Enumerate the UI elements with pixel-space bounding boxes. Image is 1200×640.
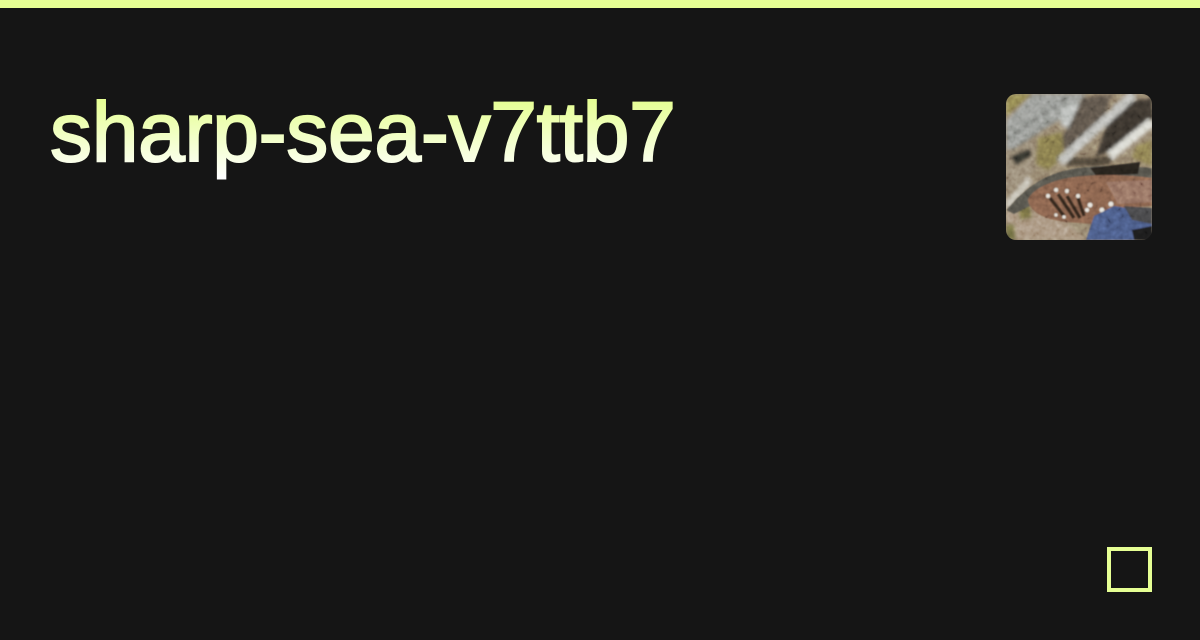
boot sole [1006,166,1152,214]
photo grain [1006,94,1152,240]
boot laces [1050,194,1084,218]
boot leather [1028,175,1152,224]
icon: hiking boot photo thumbnail [1006,94,1152,240]
square logo mark [1107,547,1152,592]
top accent bar [0,0,1200,8]
title: sharp-sea-v7ttb7 [50,85,676,179]
rock streaks [1060,94,1134,162]
jeans [1086,206,1152,240]
